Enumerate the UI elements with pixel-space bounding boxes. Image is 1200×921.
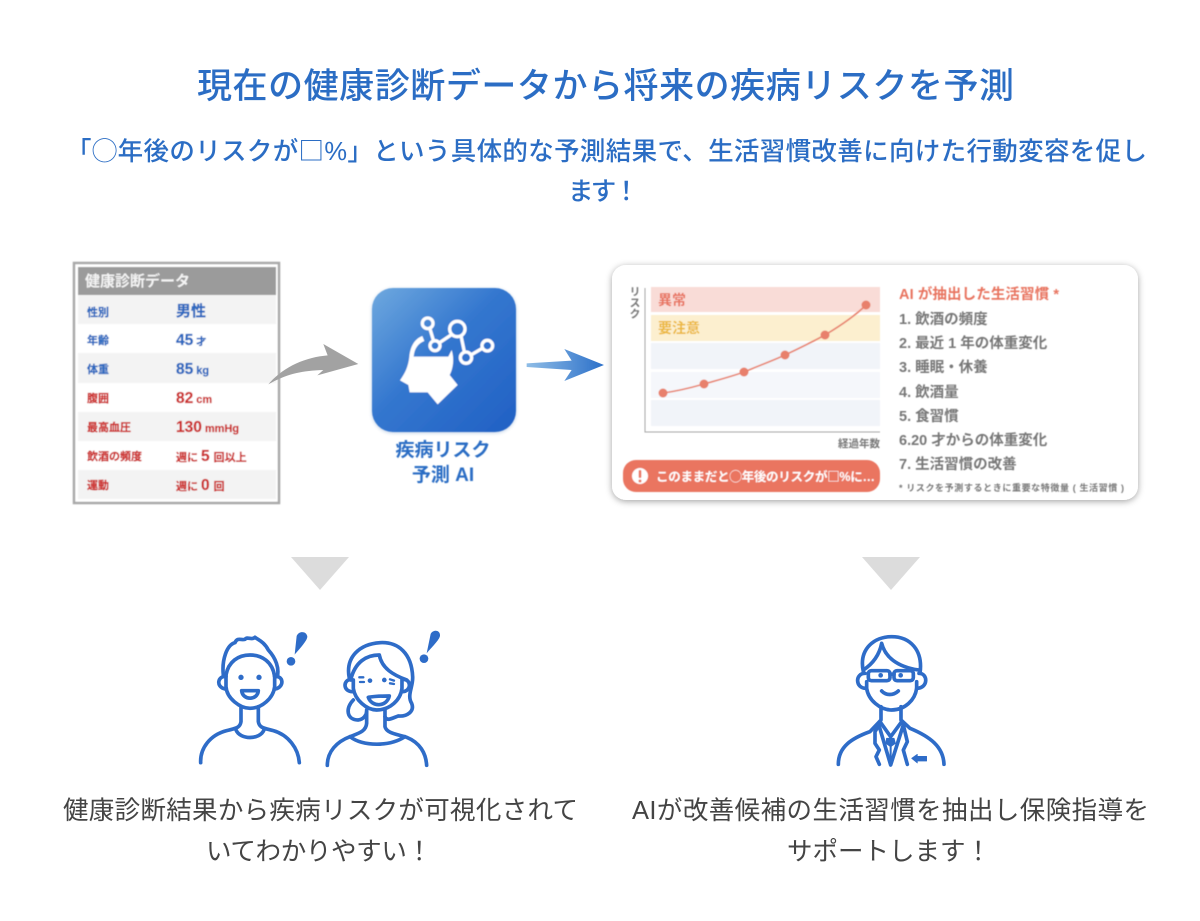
arrow: left down triangle	[291, 557, 349, 590]
warning pill: このままだと◯年後のリスクが□%に…	[656, 466, 875, 485]
table rows in blue: 85 kg	[176, 361, 209, 378]
arrow: blue arrow to results	[527, 349, 604, 381]
icon: disease risk AI app icon	[372, 288, 516, 432]
table rows in red: 82 cm	[176, 390, 212, 407]
AI extracted lifestyle list: 6.20 才からの体重変化	[899, 431, 1048, 449]
arrow: grey curved arrow to AI	[268, 344, 358, 384]
AI extracted lifestyle list: 4. 飲酒量	[899, 383, 959, 401]
arrow: right down triangle	[862, 557, 920, 590]
subtitle text: 「◯年後のリスクが□%」という具体的な予測結果で、生活習慣改善に向けた行動変容を促し	[66, 131, 1147, 168]
table rows in blue	[87, 303, 209, 378]
caption: right benefit: AIが改善候補の生活習慣を抽出し保険指導を	[632, 797, 1149, 825]
caption: left benefit: 健康診断結果から疾病リスクが可視化されて	[63, 797, 578, 825]
table rows in blue: 45 才	[176, 332, 206, 349]
table rows in red: 最高血圧	[87, 420, 131, 434]
table header	[78, 267, 276, 295]
risk chart: 要注意	[658, 320, 700, 336]
risk chart: リスク	[628, 286, 640, 319]
risk chart	[628, 286, 880, 450]
label: disease risk AI: 予測 AI	[412, 464, 474, 486]
table rows in red: 腹囲	[87, 391, 109, 405]
caption: left benefit	[63, 797, 578, 866]
AI extracted lifestyle list: 3. 睡眠・休養	[899, 359, 988, 376]
subtitle text	[66, 131, 1147, 206]
AI extracted lifestyle list	[899, 285, 1124, 493]
title: 現在の健康診断データから将来の疾病リスクを予測	[197, 67, 1014, 106]
table rows in blue: 男性	[176, 303, 206, 320]
label: disease risk AI	[395, 439, 491, 486]
icon: doctor	[838, 637, 944, 765]
caption: left benefit: いてわかりやすい！	[206, 838, 432, 866]
AI extracted lifestyle list: 7. 生活習慣の改善	[899, 455, 1017, 473]
table rows in blue: 性別	[87, 305, 109, 319]
table rows in red	[87, 390, 247, 494]
panel: health check data table	[74, 263, 279, 503]
icon: man and woman with exclamation marks	[201, 631, 440, 765]
subtitle text: ます！	[568, 178, 639, 206]
table header: 健康診断データ	[85, 272, 190, 290]
man	[201, 632, 307, 763]
AI extracted lifestyle list: AI が抽出した生活習慣 *	[899, 285, 1059, 303]
label: disease risk AI: 疾病リスク	[395, 439, 491, 461]
table rows in blue: 体重	[87, 362, 109, 376]
table rows in blue: 年齢	[87, 333, 109, 347]
AI extracted lifestyle list: 5. 食習慣	[899, 407, 959, 425]
AI extracted lifestyle list: * リスクを予測するときに重要な特徴量 ( 生活習慣 )	[899, 482, 1124, 493]
table rows in red: 運動	[87, 478, 109, 492]
caption: right benefit	[632, 797, 1149, 866]
table rows in red: 週に0 回	[176, 477, 225, 494]
table rows in red: 週に5 回以上	[176, 448, 247, 465]
neural nodes	[422, 318, 493, 363]
AI extracted lifestyle list: 2. 最近 1 年の体重変化	[899, 334, 1048, 352]
risk chart: 異常	[658, 292, 686, 308]
risk chart: 経過年数	[838, 437, 880, 450]
woman	[327, 631, 440, 765]
warning pill	[623, 460, 880, 492]
head silhouette	[400, 336, 458, 404]
table row shading	[78, 295, 276, 499]
table rows in red: 130 mmHg	[176, 419, 239, 436]
table rows in red: 飲酒の頻度	[87, 449, 142, 463]
panel: prediction result card	[612, 265, 1138, 500]
caption: right benefit: サポートします！	[787, 838, 991, 866]
AI extracted lifestyle list: 1. 飲酒の頻度	[899, 310, 988, 328]
